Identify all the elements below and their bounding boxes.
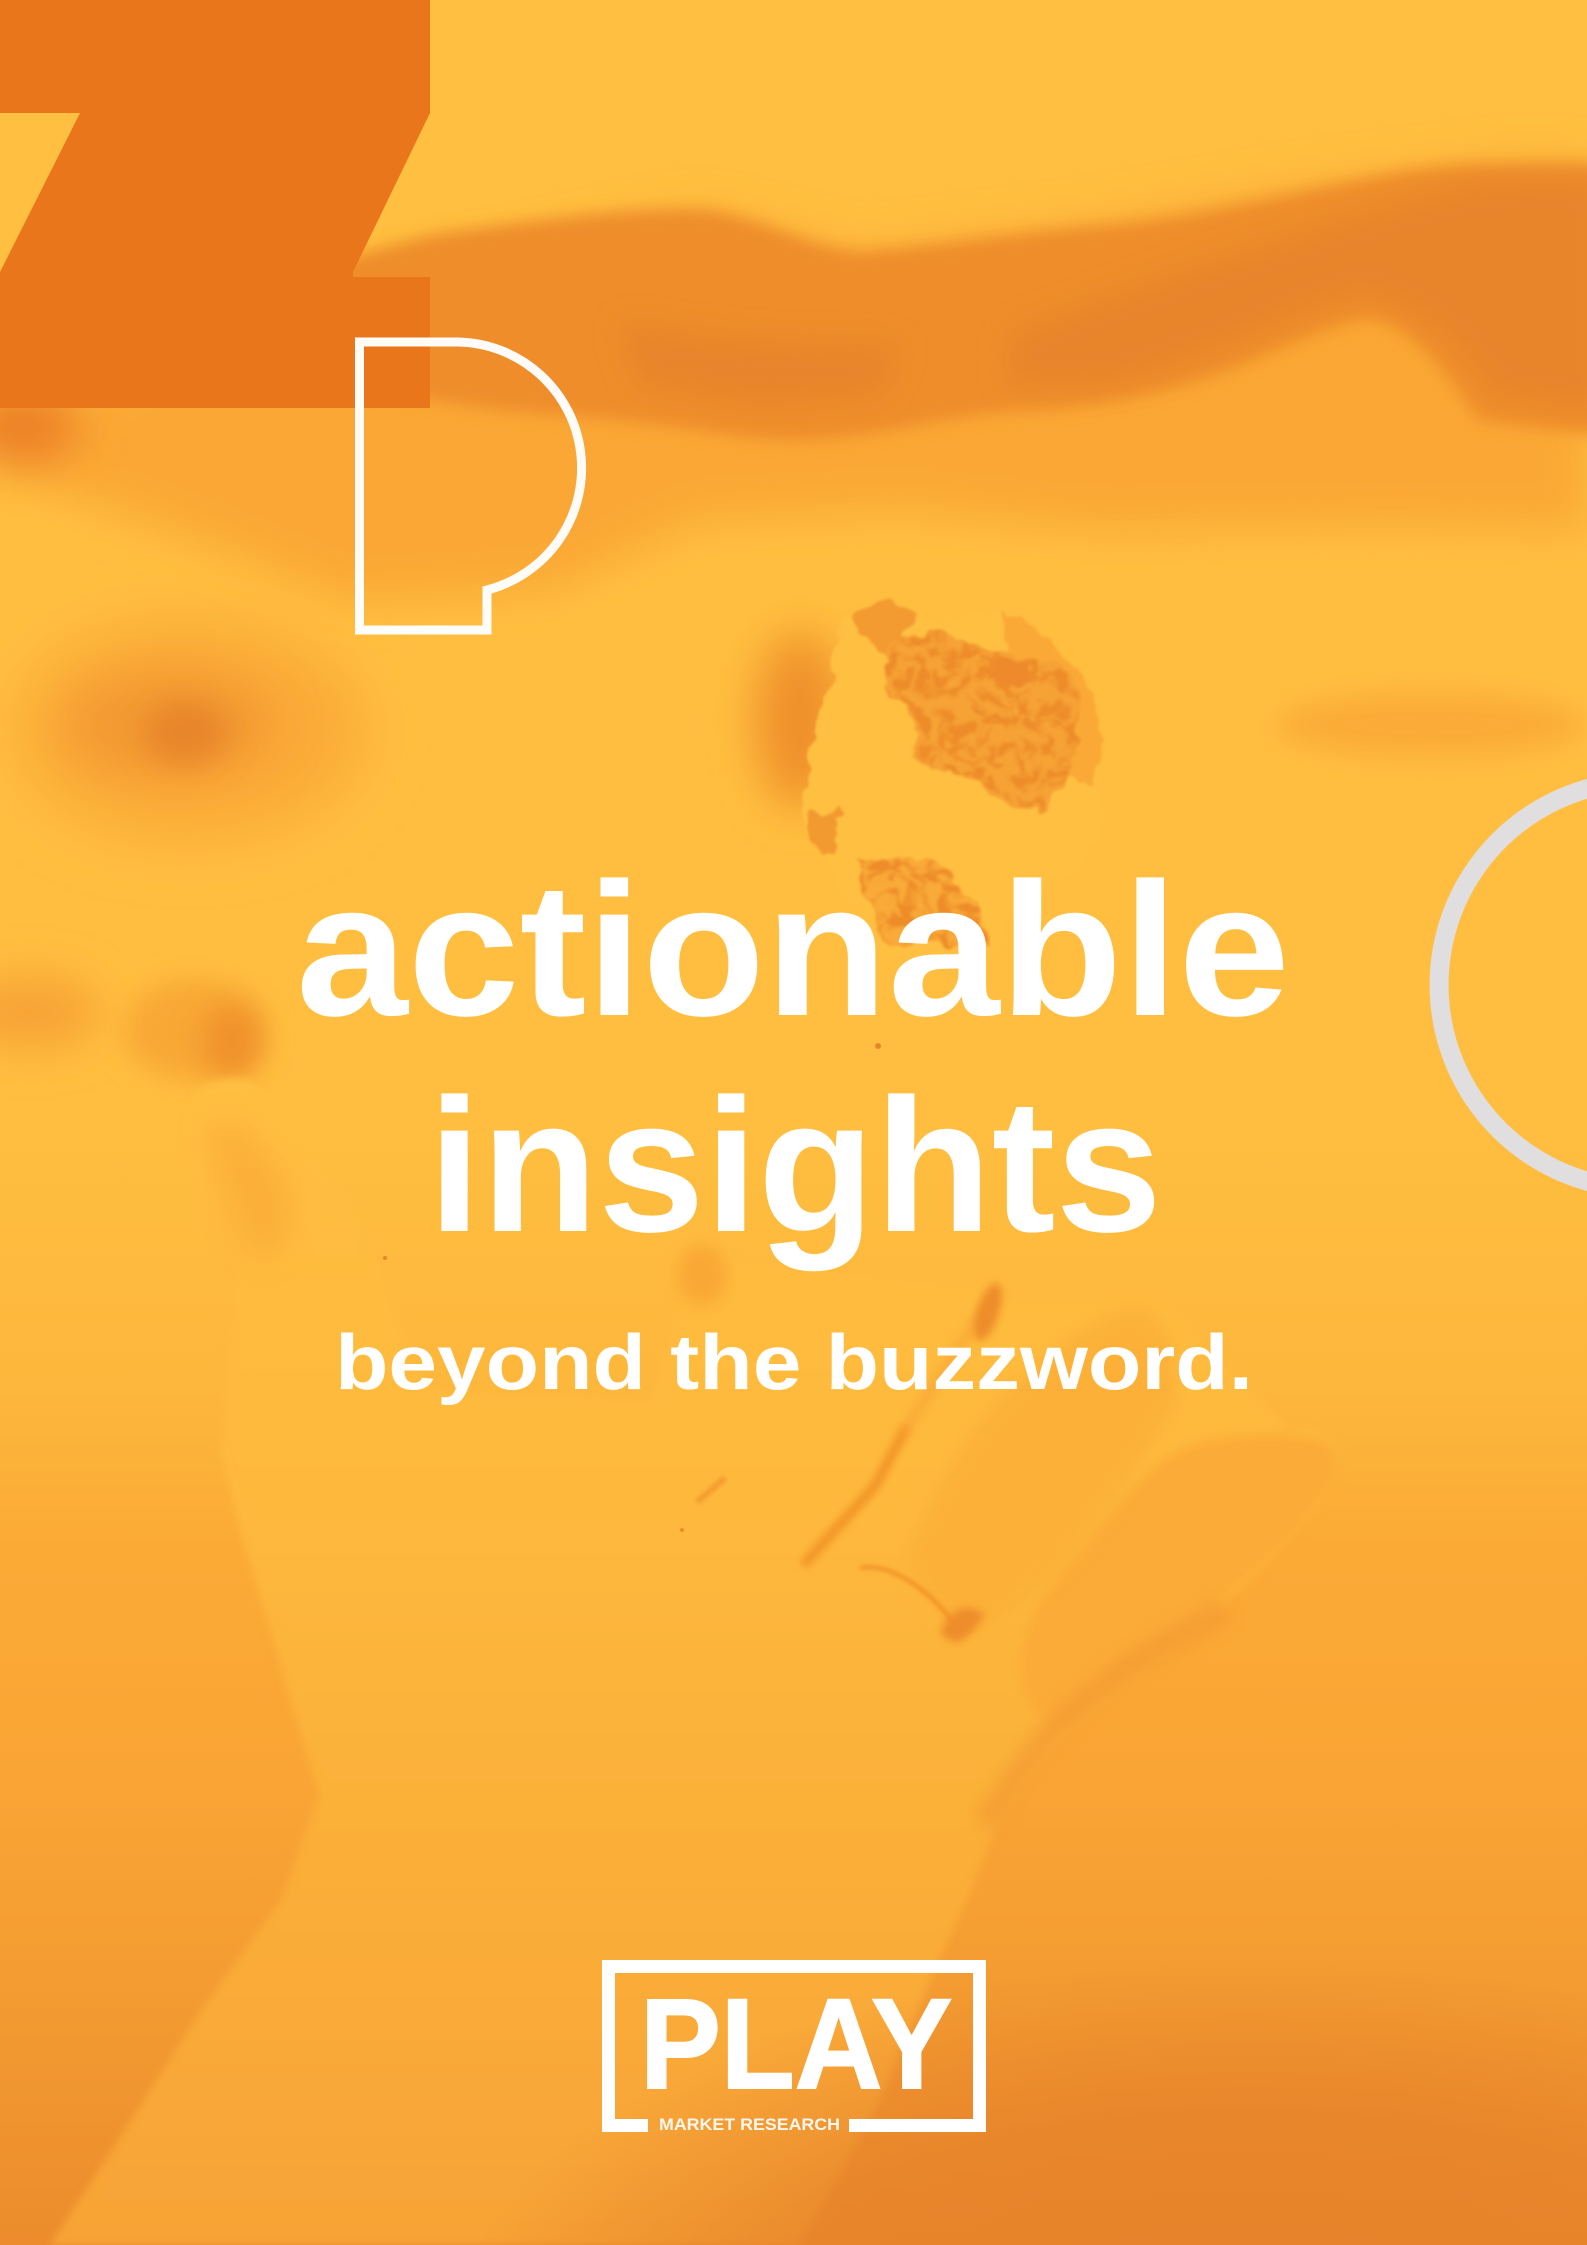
logo: PLAY market research: MARKET RESEARCH: [659, 2116, 840, 2134]
title: insights: [428, 1060, 1162, 1272]
shape: Z block top left: [0, 0, 430, 408]
ring outline at right edge: [1439, 786, 1587, 1184]
title: [296, 844, 1290, 1272]
hand: [50, 1043, 1339, 2245]
subtitle: beyond the buzzword.: [335, 1318, 1253, 1406]
logo: PLAY market research: PLAY: [640, 1973, 952, 2116]
nugget held above the hand: [800, 607, 1102, 960]
icon: speech bubble D outline: [360, 342, 582, 630]
title: actionable: [296, 844, 1290, 1056]
